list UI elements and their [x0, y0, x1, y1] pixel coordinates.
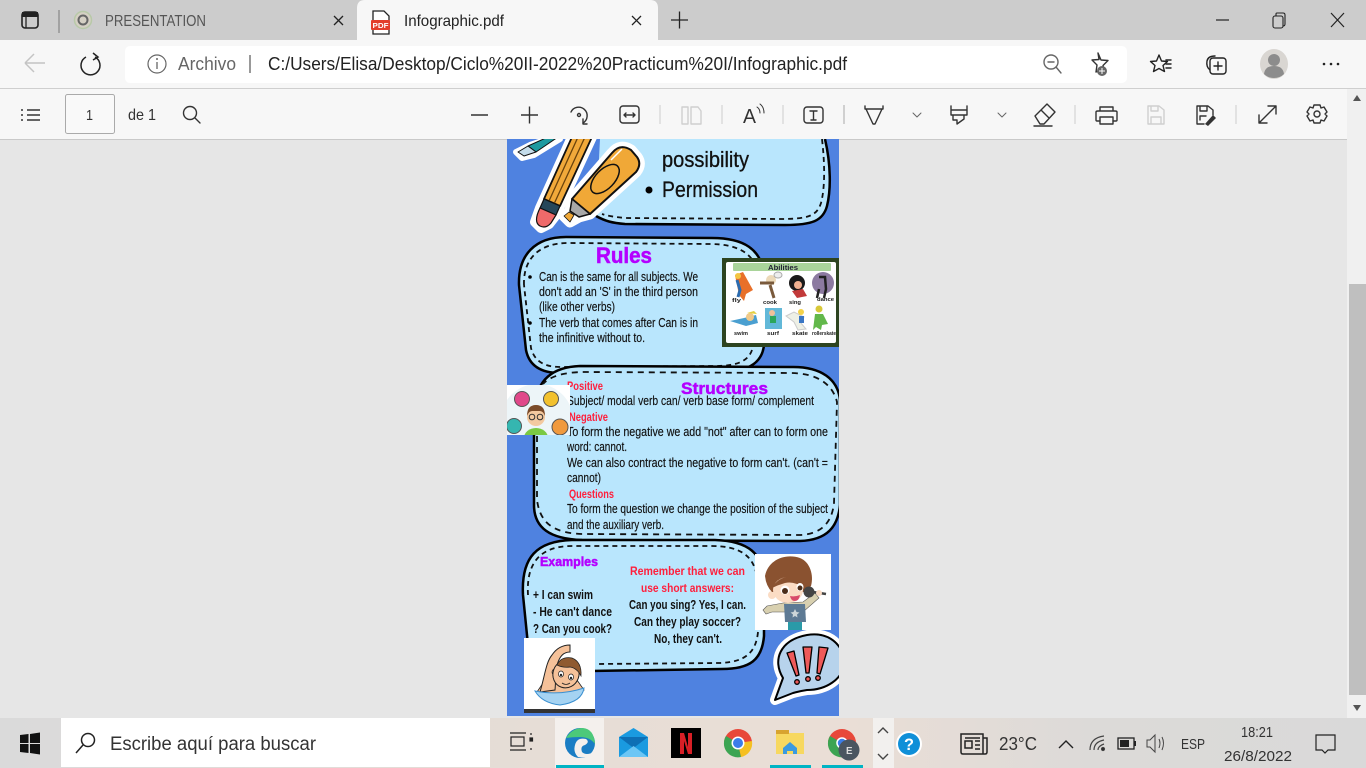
icon: add favorite: [1092, 53, 1108, 76]
panel: structures: [534, 366, 840, 541]
text: questions: and the auxiliary verb.: [567, 518, 664, 532]
address toolbar: [0, 40, 1366, 88]
icon: Netflix: [671, 728, 701, 758]
image: boy singing: [755, 554, 831, 630]
clock: 18:21: [1241, 724, 1273, 741]
tab title: presentation: PRESENTATION: [105, 13, 206, 30]
text: rules list: don't add an 'S' in the third person: [539, 285, 698, 299]
icon: add text: [804, 107, 823, 123]
icon: profile: [1260, 49, 1288, 79]
text: positive: [567, 379, 814, 408]
abilities labels: skate: [792, 331, 808, 337]
icon: read aloud: [743, 104, 764, 128]
scrollbar: [1347, 89, 1366, 718]
page number box: 1: [86, 107, 93, 124]
text: short answers: Can you sing? Yes, I can.: [629, 598, 746, 612]
weather temperature: 23°C: [999, 734, 1037, 754]
text: rules list: The verb that comes after Can is in: [539, 316, 698, 330]
icon: zoom in plus: [521, 106, 538, 124]
icon: Mail: [619, 728, 648, 757]
text: negative: To form the negative we add "not" after can to form one: [567, 425, 828, 439]
text: examples list: ? Can you cook?: [533, 622, 612, 636]
text: questions: [567, 487, 828, 532]
heading: examples: Examples: [540, 554, 598, 569]
bullet item: permission: Permission: [662, 177, 758, 202]
scrollbar up arrow: [1353, 95, 1361, 101]
icon: news: [961, 734, 987, 754]
viewer background: [0, 139, 1347, 718]
icon: page view: [682, 107, 701, 124]
icon: contents: [21, 110, 40, 120]
language: ESP: [1181, 736, 1205, 753]
icon: speaker: [1147, 735, 1164, 752]
tab title: infographic: Infographic.pdf: [404, 13, 505, 30]
icon: draw: [865, 106, 883, 124]
icon: help: ?: [904, 735, 914, 754]
icon: pencil: [535, 137, 592, 228]
text: negative: cannot): [567, 471, 601, 485]
active tab: [357, 0, 658, 40]
abilities figures: [730, 272, 834, 330]
icon: Edge: [565, 728, 595, 758]
icon: help: [896, 731, 922, 757]
icon: notifications: [1316, 735, 1335, 753]
text: negative: word: cannot.: [566, 440, 627, 454]
text: examples list: - He can't dance: [533, 605, 612, 619]
clock: 26/8/2022: [1224, 748, 1292, 765]
PDF toolbar: [0, 89, 1347, 140]
text: negative: We can also contract the negative to form can't. (can't =: [567, 456, 828, 470]
abilities labels: dance: [817, 297, 834, 303]
icon: orange marker: [564, 147, 639, 222]
text: short answers: [629, 564, 746, 646]
text: examples list: [533, 588, 612, 636]
address bar: [125, 46, 1127, 83]
icon: back: [25, 54, 45, 72]
icon: task view: [510, 733, 532, 750]
Windows taskbar: [0, 718, 1366, 768]
image: abilities chart: [722, 258, 839, 347]
icon: search: [76, 734, 94, 753]
text: short answers: Remember that we can: [630, 564, 745, 578]
text: rules list: the infinitive without to.: [539, 331, 645, 345]
icon: close active tab: [632, 16, 641, 25]
heading: rules: Rules: [596, 243, 652, 268]
text: short answers: No, they can't.: [654, 632, 722, 646]
tray scroll: [873, 718, 894, 768]
icon: Windows logo: [20, 732, 40, 754]
exclamation marks: [787, 647, 828, 684]
search placeholder: Escribe aquí para buscar: [110, 734, 317, 755]
icon: collections: [1207, 56, 1226, 74]
text: rules list: Can is the same for all subjects. We: [539, 270, 698, 284]
icon: wifi: [1090, 736, 1104, 750]
image: boy with ideas: [507, 385, 570, 435]
icon: search: [184, 106, 200, 123]
text: negative: [566, 410, 828, 485]
icon: more: [1323, 63, 1339, 65]
abilities labels: rollerskate: [812, 331, 836, 337]
icon: presentation tab logo: [74, 12, 92, 28]
scrollbar thumb: [1349, 284, 1366, 695]
icon: rotate: [571, 107, 587, 124]
icon: close window: [1331, 13, 1344, 27]
abilities labels: sing: [789, 300, 801, 306]
label: archivo: Archivo: [178, 54, 236, 74]
icon: save disabled: [1148, 106, 1164, 124]
abilities labels: cook: [763, 300, 778, 306]
icon: read aloud: A: [743, 106, 757, 128]
icon: Chrome profile: E: [846, 746, 853, 757]
icon: save as: [1197, 106, 1216, 126]
icon: eraser: [1034, 104, 1055, 126]
icon: teal marker: [516, 137, 560, 158]
icon: zoom out: [1044, 55, 1061, 73]
abilities labels: swim: [734, 331, 748, 337]
icon: settings: [1307, 105, 1327, 123]
text: short answers: use short answers:: [641, 581, 734, 595]
clock: [1224, 724, 1292, 765]
abilities labels: [732, 297, 836, 337]
icon: draw dropdown: [913, 113, 921, 117]
text: positive: Positive: [567, 379, 603, 393]
icon: File Explorer: [776, 730, 804, 754]
active app highlight: [555, 718, 604, 768]
infographic page: [501, 137, 845, 716]
address url: C:/Users/Elisa/Desktop/Ciclo%20II-2022%20Practicum%20I/Infographic.pdf: [268, 54, 848, 74]
image: swimmer: [524, 638, 595, 713]
text: short answers: Can they play soccer?: [634, 615, 741, 629]
panel: examples: [523, 540, 764, 671]
abilities labels: surf: [767, 331, 779, 337]
icon: favorites: [1150, 55, 1171, 72]
search box: [61, 718, 490, 767]
icon: info: [148, 55, 166, 73]
browser tab bar: [0, 0, 1366, 40]
text: questions: Questions: [569, 487, 614, 501]
icon: print: [1096, 107, 1117, 124]
text: negative: Negative: [569, 410, 608, 424]
text: questions: To form the question we change the position of the subject: [567, 502, 828, 516]
abilities labels: fly: [732, 298, 742, 304]
heading: structures: Structures: [681, 379, 768, 398]
text: rules list: (like other verbs): [539, 300, 615, 314]
icon: fullscreen: [1259, 106, 1276, 123]
icon: reload: [81, 53, 100, 75]
panel: uses (top): [596, 139, 830, 225]
page number box: [66, 94, 114, 134]
icon: PDF file: [371, 11, 390, 34]
icon: PDF file: PDF: [372, 23, 389, 30]
page background: [507, 139, 839, 716]
scrollbar down arrow: [1353, 705, 1361, 711]
icon: highlight dropdown: [998, 113, 1006, 117]
text: rules list: [528, 270, 698, 345]
heading fragment: bullet item: possibility: [662, 147, 749, 172]
icon: fit width: [620, 106, 639, 123]
icon: restore: [1273, 13, 1285, 28]
text: positive: Subject/ modal verb can/ verb base form/ complement: [567, 394, 814, 408]
text: examples list: + I can swim: [533, 588, 593, 602]
icon: Chrome: [724, 729, 752, 757]
icon: minimize: [1216, 19, 1229, 21]
icon: new tab: [671, 12, 688, 28]
page count: de 1: [128, 107, 156, 124]
icon: exclamation speech bubble: [775, 634, 845, 700]
bullet dot: [646, 186, 652, 194]
icon: tray chevron: [1059, 741, 1073, 748]
panel: rules: [519, 237, 764, 373]
icon: highlight: [951, 106, 967, 124]
icon: close presentation tab: [334, 16, 343, 25]
icon: zoom out minus: [471, 114, 488, 116]
icon: Chrome profile: [828, 729, 860, 760]
abilities header: Abilities: [768, 263, 798, 272]
icon: tab actions: [22, 12, 38, 28]
icon: battery: [1118, 738, 1136, 749]
